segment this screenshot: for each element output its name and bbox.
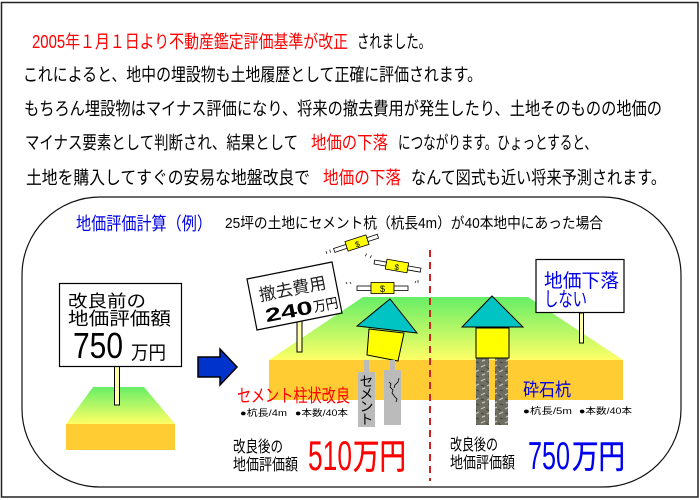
icon: flying money 1: [325, 231, 380, 259]
gravel result value: [528, 435, 625, 478]
cement result label: 改良後の: [233, 438, 283, 456]
cracked cement column: [384, 360, 401, 425]
line 1: されました。: [357, 32, 431, 52]
icon: flying money 1: $: [354, 239, 361, 249]
panel heading: 地価評価計算（例）: [76, 214, 212, 234]
cement result label: 地価評価額: [233, 456, 298, 474]
removal cost signpost: 万円: [312, 294, 339, 315]
tilted house: [357, 299, 417, 361]
before: signpost: 改良前の: [68, 292, 146, 311]
cement result value: 510: [308, 432, 352, 479]
line 5: 土地を購入してすぐの安易な地盤改良で: [26, 168, 310, 188]
arrow: [198, 349, 237, 385]
cement result value: 万円: [353, 438, 406, 477]
line 4: マイナス要素として判断され、結果として: [25, 133, 298, 153]
removal cost signpost: [247, 262, 342, 352]
gravel method specs: ●本数/40本: [579, 405, 632, 416]
cement method specs: [240, 407, 348, 418]
gravel result label: [450, 436, 515, 472]
icon: flying money 2: $: [394, 263, 400, 272]
before: signpost: 地価評価額: [68, 309, 171, 329]
no price drop signpost: [536, 260, 624, 343]
gravel method label: 砕石杭: [523, 380, 571, 400]
gravel method specs: [523, 405, 632, 416]
before: signpost: [60, 284, 182, 405]
gravel piles: [476, 358, 508, 425]
icon: flying money 3: [346, 280, 418, 294]
cement method label: セメント柱状改良: [237, 386, 350, 406]
gravel result label: 地価評価額: [450, 454, 515, 472]
before: small land: [66, 387, 175, 450]
line 4: 地価の下落: [311, 133, 388, 153]
line 5: 地価の下落: [323, 168, 401, 188]
upright house: [462, 296, 523, 358]
no price drop signpost: しない: [544, 289, 587, 311]
removal cost signpost: 撤去費用: [257, 273, 328, 305]
panel condition text: 25坪の土地にセメント杭（杭長4m）が40本地中にあった場合: [225, 215, 603, 232]
line 4: [25, 133, 597, 153]
cement method specs: ●杭長/4m: [240, 407, 287, 418]
gravel result value: 750: [528, 435, 570, 478]
icon: flying money 2: [363, 253, 422, 276]
removal cost signpost: 240: [263, 297, 315, 327]
line 1: 2005年１月１日より不動産鑑定評価基準が改正: [32, 32, 348, 52]
before: signpost: 750: [73, 325, 123, 366]
cement column with label: セメント: [358, 374, 374, 426]
line 2: これによると、地中の埋設物も土地履歴として正確に評価されます。: [23, 65, 482, 85]
gravel method specs: ●杭長/5m: [523, 405, 572, 416]
intro text block: [23, 32, 666, 188]
after: large land: [269, 297, 623, 400]
icon: flying money 3: $: [380, 284, 385, 294]
gravel result label: 改良後の: [450, 436, 498, 454]
divider: [429, 250, 431, 481]
line 5: [26, 168, 666, 188]
no price drop signpost: 地価下落: [544, 270, 619, 292]
cement method specs: ●本数/40本: [295, 407, 348, 418]
before: signpost: 万円: [131, 343, 166, 364]
cement result label: [233, 438, 298, 474]
rounded example panel: [22, 197, 681, 487]
line 4: につながります。ひょっとすると、: [398, 133, 597, 153]
gravel result value: 万円: [572, 438, 625, 475]
